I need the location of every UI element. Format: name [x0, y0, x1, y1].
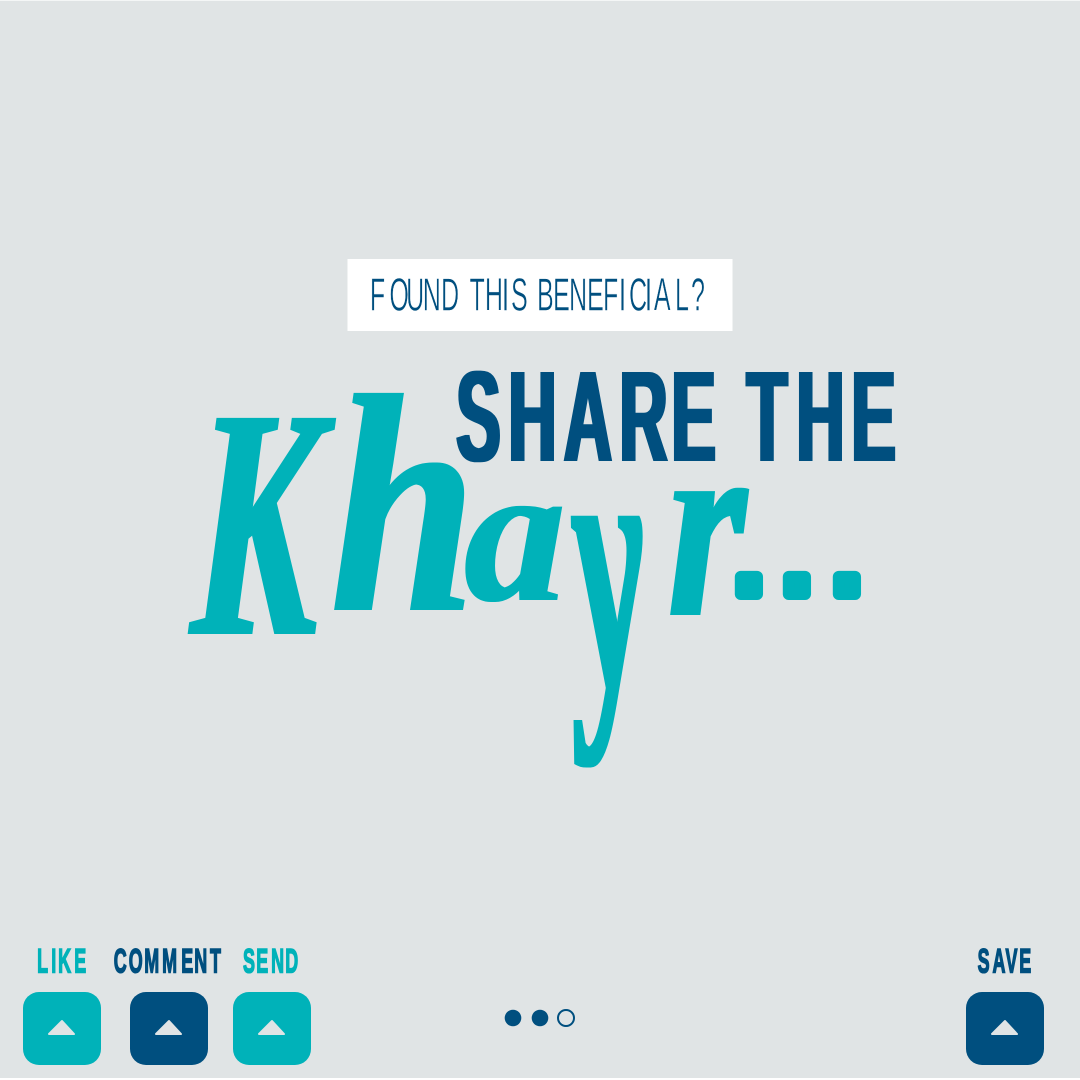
brush script word: Khayr...: a	[465, 423, 565, 644]
pagination dots	[505, 1010, 574, 1026]
callout: found this beneficial	[348, 259, 732, 331]
button: save	[966, 992, 1044, 1065]
label: save: SAVE	[978, 941, 1031, 980]
brush script word: Khayr...: ...	[733, 491, 863, 619]
label: comment: COMMENT	[114, 941, 221, 980]
callout: found this beneficial: FOUND THIS BENEFICIAL?	[370, 268, 705, 320]
brush script word: Khayr...	[187, 333, 863, 769]
brush script word: Khayr...: h	[331, 333, 476, 679]
brush script word: Khayr...: y	[539, 355, 662, 769]
brush script word: Khayr...: r	[668, 375, 748, 674]
button: comment	[130, 992, 208, 1065]
label: like: LIKE	[37, 941, 86, 980]
button: send	[233, 992, 311, 1065]
label: send: SEND	[243, 941, 298, 980]
heading: share the: SHARE THE	[456, 344, 896, 489]
button: like	[23, 992, 101, 1065]
brush script word: Khayr...: K	[187, 341, 338, 706]
